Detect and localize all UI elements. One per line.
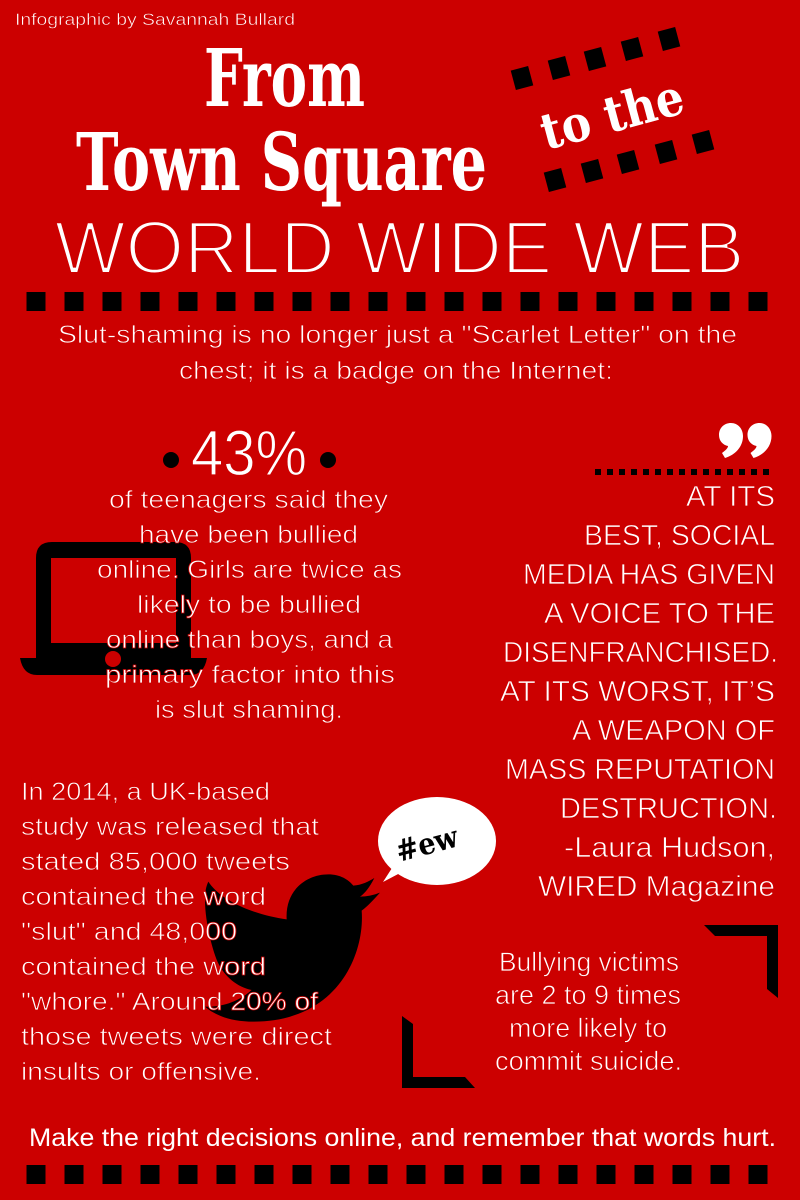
suicide statistic text: Bullying victims (499, 947, 679, 977)
icon: laptop (20, 542, 207, 675)
intro text: Slut-shaming is no longer just a "Scarlet Letter" on the (58, 321, 737, 349)
speech bubble: #ew: #ew (392, 819, 463, 870)
quote text: -Laura Hudson, (564, 832, 775, 864)
study paragraph: "slut" and 48,000 (21, 918, 237, 946)
stat description: primary factor into this (105, 661, 395, 689)
title: From Town Square: From (204, 31, 365, 125)
bottom dashed divider (26, 1165, 768, 1184)
speech bubble: #ew (378, 797, 496, 885)
study paragraph: In 2014, a UK-based (21, 778, 270, 806)
study paragraph: those tweets were direct (21, 1023, 332, 1051)
title badge: to the (511, 27, 714, 192)
icon: twitter bird (205, 874, 380, 1022)
title: From Town Square (76, 31, 487, 209)
stat description: likely to be bullied (137, 591, 361, 619)
quote text: MEDIA HAS GIVEN (523, 559, 775, 591)
quote text: AT ITS WORST, IT’S (500, 676, 775, 708)
stat description: have been bullied (139, 521, 358, 549)
study paragraph: stated 85,000 tweets (21, 848, 290, 876)
study paragraph: insults or offensive. (21, 1058, 261, 1086)
suicide statistic text: commit suicide. (495, 1046, 682, 1076)
suicide statistic text: are 2 to 9 times (495, 980, 681, 1010)
quote text: WIRED Magazine (538, 871, 775, 903)
stat description: of teenagers said they (109, 486, 389, 514)
suicide statistic text (495, 947, 682, 1076)
credit line: Infographic by Savannah Bullard (15, 10, 295, 29)
stat description: online. Girls are twice as (97, 556, 402, 584)
study paragraph: "whore." Around 20% of (21, 988, 318, 1016)
top dashed divider (26, 292, 768, 311)
quote text: A WEAPON OF (572, 715, 775, 747)
quote text: AT ITS (686, 481, 775, 513)
stat description: online than boys, and a (106, 626, 393, 654)
corner bracket: bottom left (402, 1016, 475, 1088)
study paragraph: contained the word (21, 953, 266, 981)
title: From Town Square: Town Square (76, 115, 487, 209)
stat: 43%: 43% (191, 417, 307, 489)
intro text (58, 321, 737, 385)
icon: quotation marks (719, 423, 772, 458)
intro text: chest; it is a badge on the Internet: (179, 357, 613, 385)
study paragraph: contained the word (21, 883, 266, 911)
quote text: BEST, SOCIAL (584, 520, 775, 552)
quote text: DISENFRANCHISED. (503, 637, 778, 669)
dotted divider above quote (595, 469, 769, 475)
quote text: MASS REPUTATION (505, 754, 775, 786)
quote text: A VOICE TO THE (544, 598, 775, 630)
stat description: is slut shaming. (155, 696, 343, 724)
suicide statistic text: more likely to (509, 1013, 667, 1043)
corner bracket: top right (704, 925, 778, 998)
quote text: DESTRUCTION. (560, 793, 777, 825)
study paragraph: study was released that (21, 813, 319, 841)
quote text (500, 481, 778, 903)
closing message: Make the right decisions online, and remember that words hurt. (29, 1124, 776, 1152)
study paragraph (21, 778, 332, 1086)
title: World Wide Web: WORLD WIDE WEB (54, 206, 744, 290)
title badge: to the: to the (534, 67, 690, 162)
stat description (97, 486, 402, 724)
